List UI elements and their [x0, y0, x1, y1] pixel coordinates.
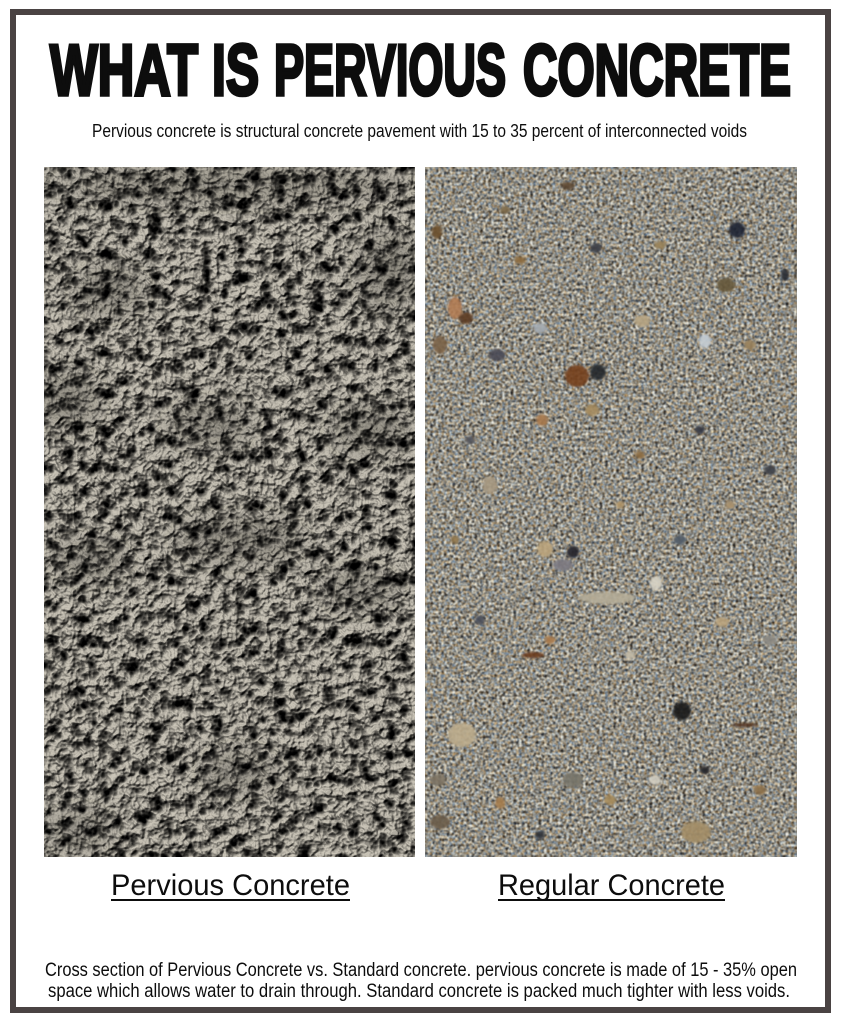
title: PERVIOUS — [274, 31, 506, 111]
description text — [45, 960, 797, 1002]
caption: pervious concrete: Pervious Concrete — [111, 869, 350, 902]
photo: pervious concrete texture — [40, 167, 420, 857]
title: WHAT — [50, 31, 198, 111]
caption: regular concrete: Regular Concrete — [498, 869, 725, 902]
title — [50, 31, 791, 111]
photo: regular concrete texture — [425, 167, 797, 857]
pebbles in regular concrete — [430, 182, 789, 843]
title: IS — [212, 31, 259, 111]
